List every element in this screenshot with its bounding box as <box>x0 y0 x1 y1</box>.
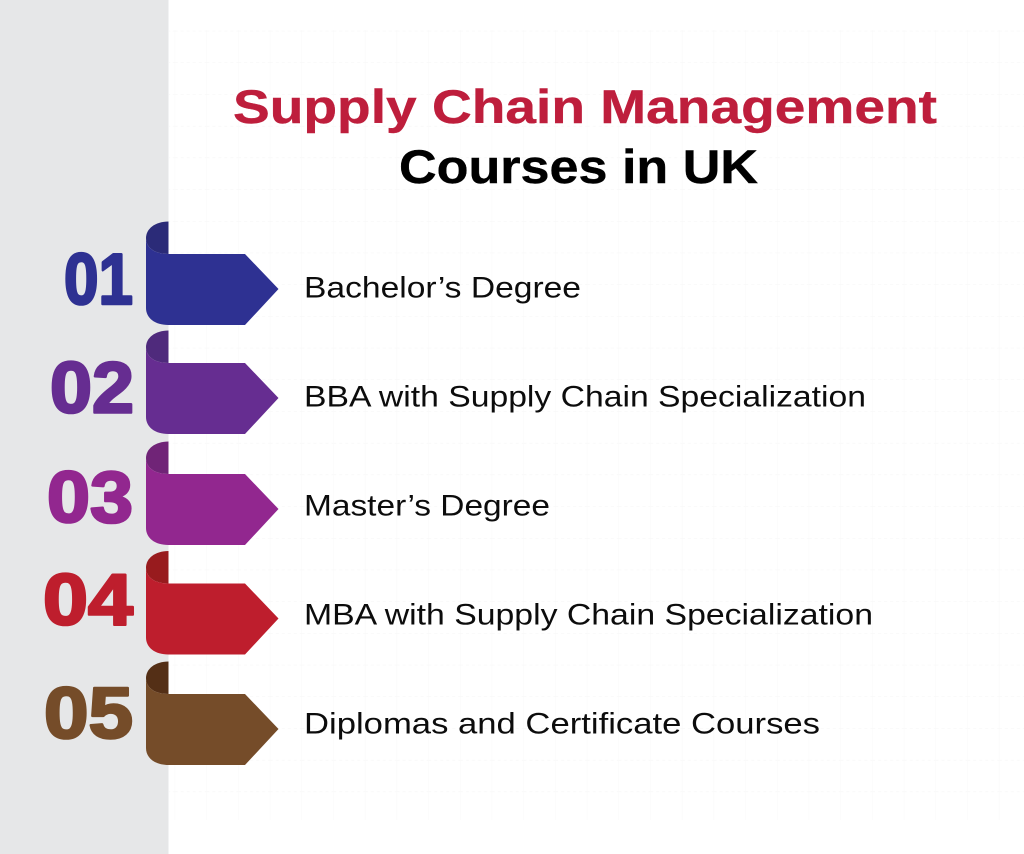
item 02 <box>50 330 866 434</box>
item 03 <box>47 442 550 545</box>
ribbon arrow 02 <box>146 330 278 434</box>
title <box>233 80 937 193</box>
ribbon arrow 05 <box>146 662 278 765</box>
grey side panel <box>0 0 168 854</box>
title: Courses in UK <box>399 140 758 193</box>
ribbon arrow 04 <box>146 551 278 654</box>
number 01: 01 <box>64 240 133 320</box>
ribbon arrow 03 <box>146 442 278 545</box>
number 03: 03 <box>47 458 133 538</box>
label 05: Diplomas and Certificate Courses <box>304 708 820 740</box>
label 01: Bachelor’s Degree <box>304 272 581 304</box>
number 04: 04 <box>43 560 133 640</box>
title: Supply Chain Management <box>233 80 937 133</box>
label 04: MBA with Supply Chain Specialization <box>304 598 873 632</box>
item 04 <box>43 551 873 654</box>
item 05 <box>44 662 820 765</box>
item 01 <box>64 222 581 325</box>
number 05: 05 <box>44 674 133 754</box>
label 03: Master’s Degree <box>304 490 550 522</box>
number 02: 02 <box>50 348 134 428</box>
label 02: BBA with Supply Chain Specialization <box>304 380 866 414</box>
ribbon arrow 01 <box>146 222 278 325</box>
